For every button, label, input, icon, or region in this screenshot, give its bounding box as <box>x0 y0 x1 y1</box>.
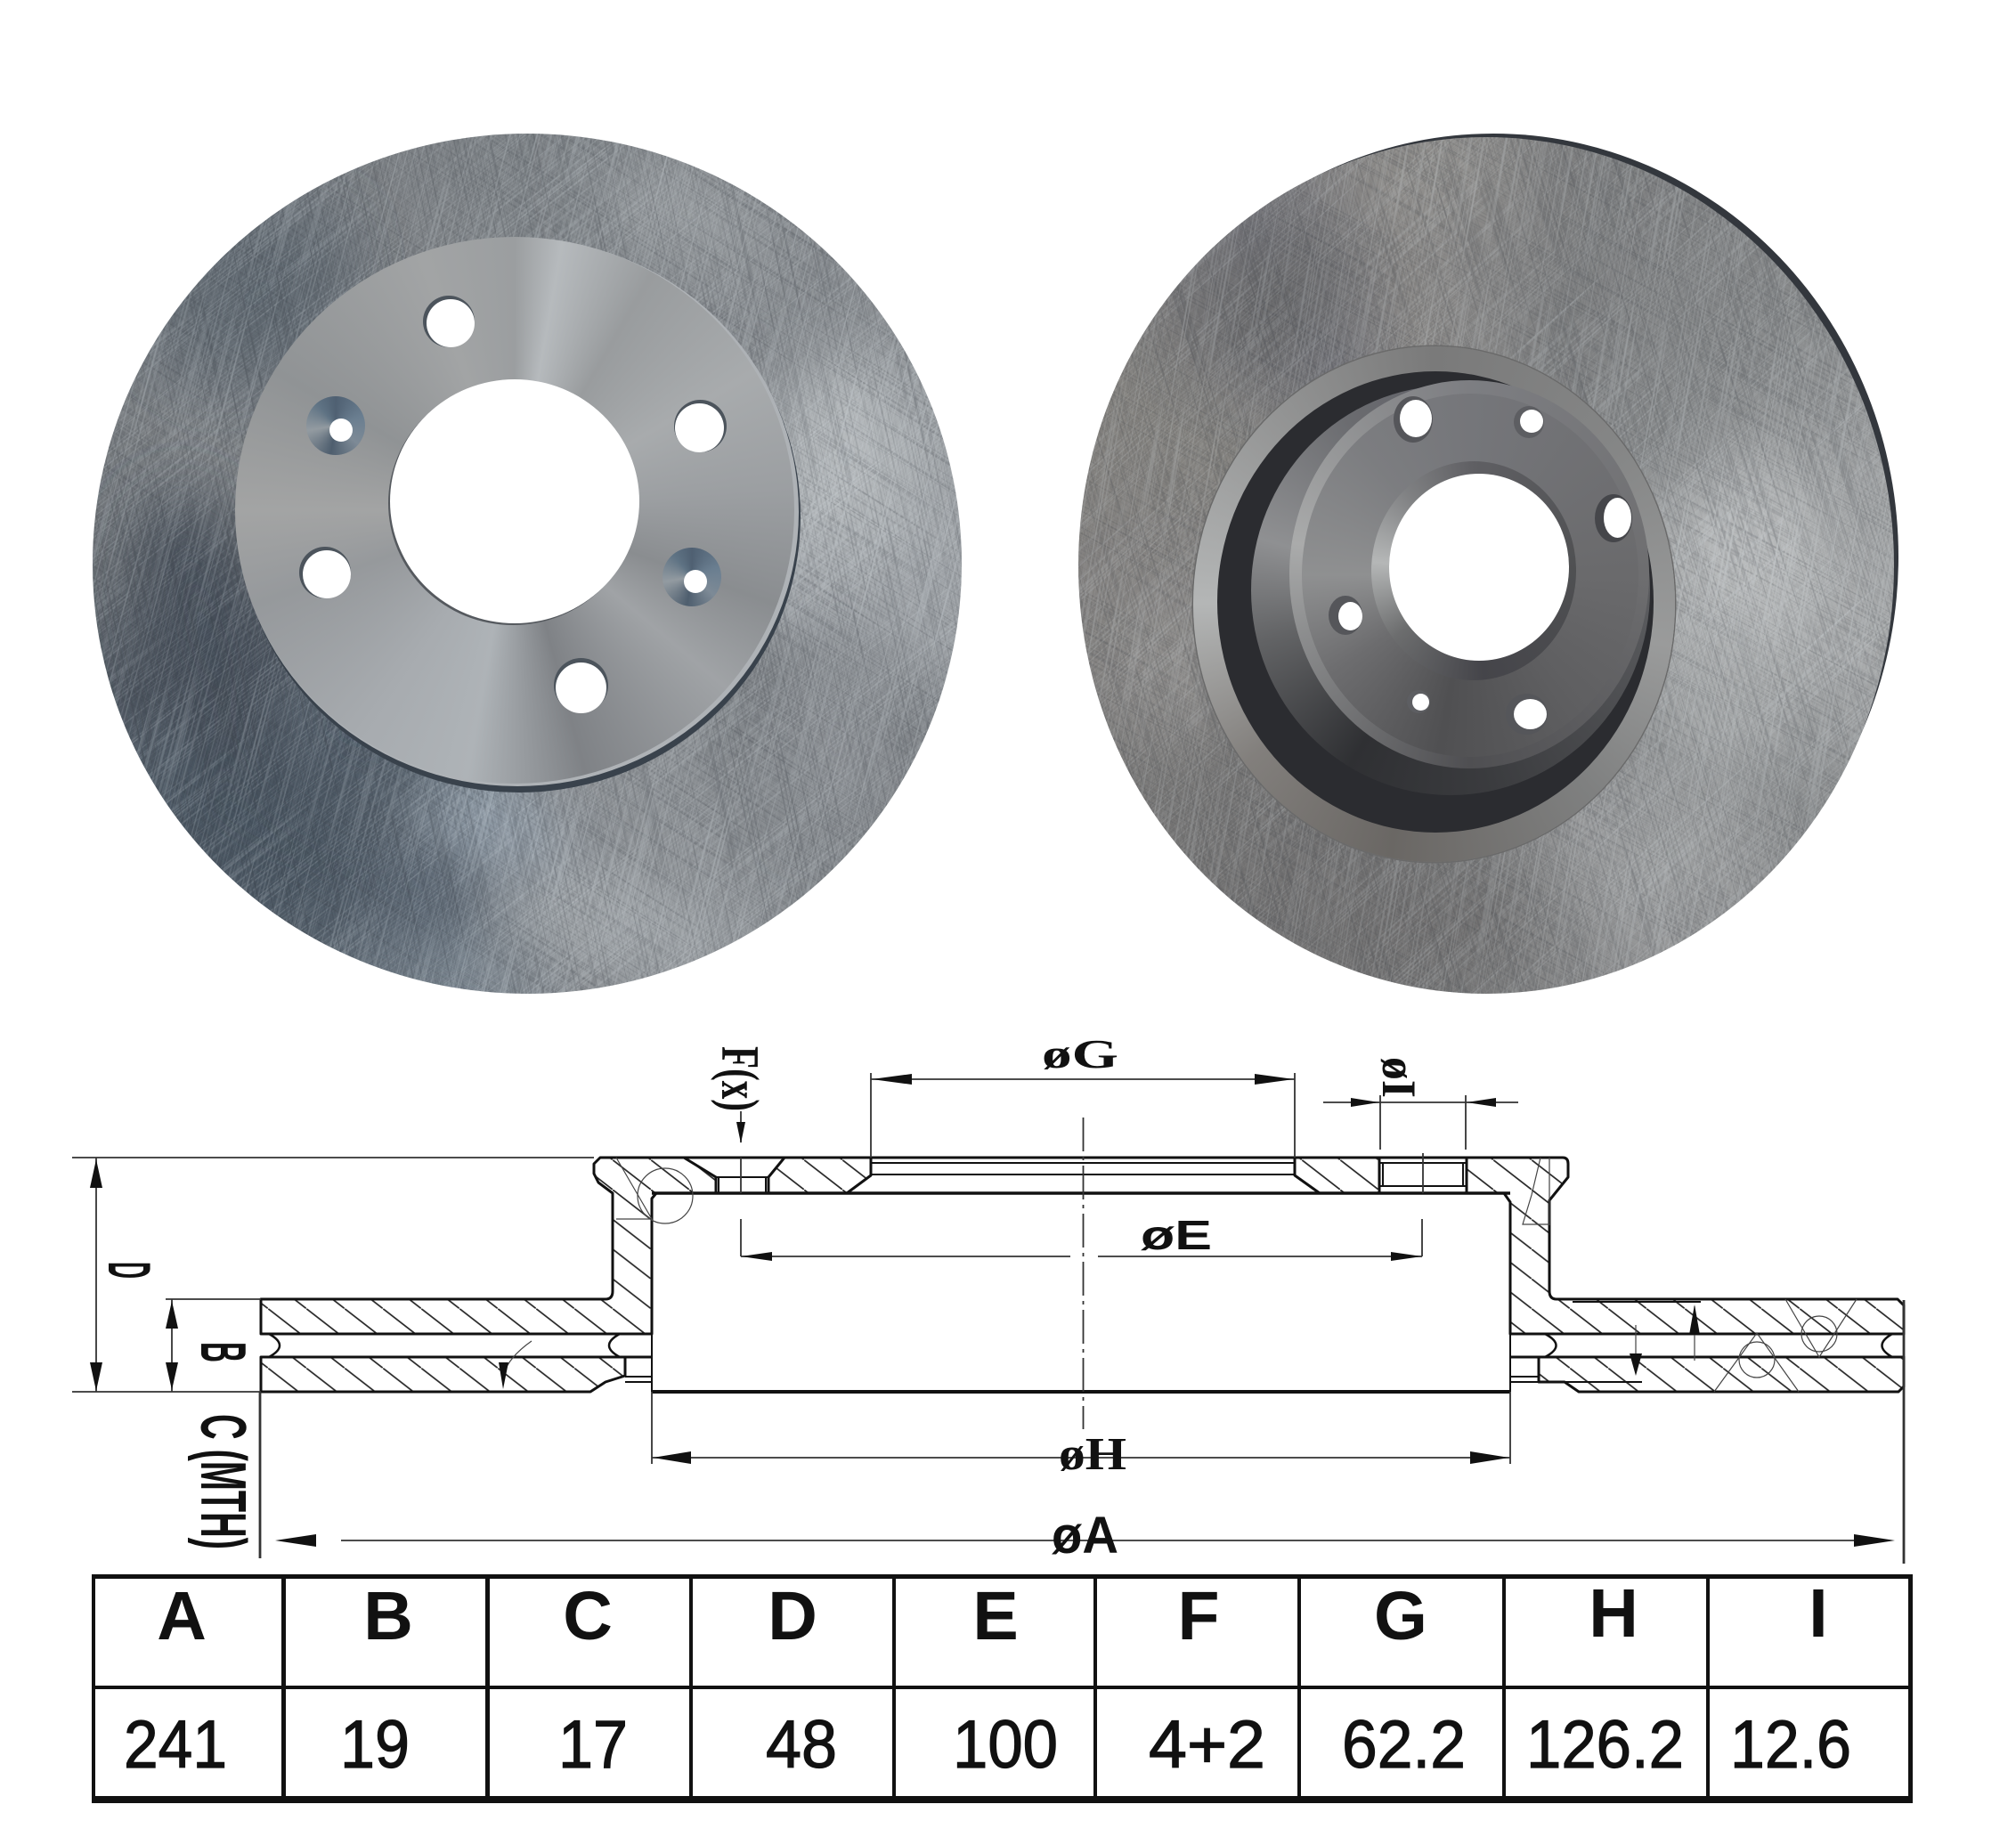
disc face <box>1078 137 1894 994</box>
dimension C (MTH): C (MTH) <box>187 1414 258 1549</box>
centre line <box>1083 1118 1085 1429</box>
bore chamfer <box>1371 461 1576 680</box>
dimension diameter E <box>741 1212 1422 1261</box>
bolt hole 3 <box>303 550 351 598</box>
hub side wall <box>236 238 799 786</box>
section outlines and bell lines <box>261 1158 1904 1392</box>
disc face <box>93 134 962 994</box>
flat ridge <box>1289 380 1649 768</box>
bolt hole 4 opening <box>1514 699 1547 729</box>
low-frequency light and shadow on the disc <box>1118 137 1830 992</box>
bolt hole 1 opening <box>1400 400 1432 437</box>
countersunk screw hole 1 <box>306 396 365 455</box>
bolt hole 1 <box>427 299 475 347</box>
section body, left half <box>261 1158 871 1392</box>
screw hole 2 <box>684 570 707 593</box>
table values: 62.2 <box>1342 1707 1466 1783</box>
hub flat <box>1302 394 1638 757</box>
table header letters: A <box>157 1578 207 1654</box>
bolt hole 3 <box>1329 596 1362 635</box>
screw hole 2 opening <box>1412 694 1429 711</box>
dimension diameter A: øA <box>1052 1507 1118 1565</box>
thin construction details <box>503 1158 1857 1392</box>
photo: brake disc, bell side <box>1078 134 1898 994</box>
hub face <box>235 237 794 784</box>
table header letters: D <box>768 1578 817 1654</box>
table values <box>124 1707 1851 1783</box>
bolt hole 3 opening <box>1338 602 1362 630</box>
countersunk screw hole 2 <box>663 548 721 606</box>
table header letters: B <box>363 1578 413 1654</box>
extension lines <box>72 1073 1904 1564</box>
dimension D: D <box>95 1262 163 1279</box>
centre bore <box>390 379 639 623</box>
dimension diameter G: øG <box>1042 1031 1118 1077</box>
dimension diameter I: øI <box>1372 1057 1426 1098</box>
table header letters <box>157 1575 1828 1654</box>
bolt hole 2 <box>1595 494 1632 542</box>
dimension B: B <box>187 1342 258 1362</box>
table values: 19 <box>340 1707 410 1783</box>
bell wall <box>1251 386 1650 795</box>
bolt hole 1 <box>1394 396 1433 443</box>
bolt hole 4 <box>1506 694 1548 735</box>
dimension diameter I <box>1323 1057 1518 1107</box>
table header letters: E <box>972 1578 1019 1654</box>
section body, right half <box>1295 1158 1904 1392</box>
dimension D <box>90 1158 163 1392</box>
table header letters: F <box>1177 1578 1220 1654</box>
machined scratch texture <box>1078 137 1894 994</box>
small section arrows <box>499 1305 1700 1389</box>
table values: 17 <box>558 1707 628 1783</box>
centre bore <box>1389 474 1569 661</box>
screw hole 1 <box>1514 406 1544 438</box>
table values: 12.6 <box>1730 1707 1851 1783</box>
table header letters: G <box>1374 1578 1427 1654</box>
dimension table <box>92 1574 1913 1803</box>
table values: 48 <box>766 1707 837 1783</box>
table values: 126.2 <box>1526 1707 1684 1783</box>
disc side edge <box>1088 134 1898 979</box>
dimension diameter E: øE <box>1141 1212 1212 1258</box>
machined scratch texture <box>93 134 962 994</box>
bolt hole 2 <box>675 403 724 452</box>
screw hole 2 <box>1407 690 1430 713</box>
table values: 100 <box>953 1707 1058 1783</box>
screw hole 1 opening <box>1520 410 1543 433</box>
dimension diameter G <box>871 1031 1295 1085</box>
table header letters: I <box>1809 1575 1828 1652</box>
table header letters: H <box>1589 1575 1638 1652</box>
dimension B <box>166 1299 258 1392</box>
bolt hole 4 <box>556 662 606 713</box>
photo: brake disc, hub side <box>93 134 962 994</box>
table values: 4+2 <box>1149 1707 1265 1783</box>
table grid <box>92 1574 1913 1803</box>
bolt hole 2 opening <box>1604 498 1631 538</box>
dimension diameter H: øH <box>1059 1429 1126 1480</box>
dimension diameter A <box>275 1507 1895 1565</box>
dimension diameter H <box>652 1429 1510 1480</box>
screw hole 1 <box>329 419 353 442</box>
raised rim ring <box>1193 346 1675 862</box>
dimension F(x): F(x) <box>711 1046 769 1111</box>
table header letters: C <box>563 1578 613 1654</box>
inner dark cast wall <box>1217 371 1654 833</box>
low-frequency light and shadow on the disc <box>110 150 940 982</box>
table values: 241 <box>124 1707 227 1783</box>
hub shadow edge <box>238 240 801 792</box>
